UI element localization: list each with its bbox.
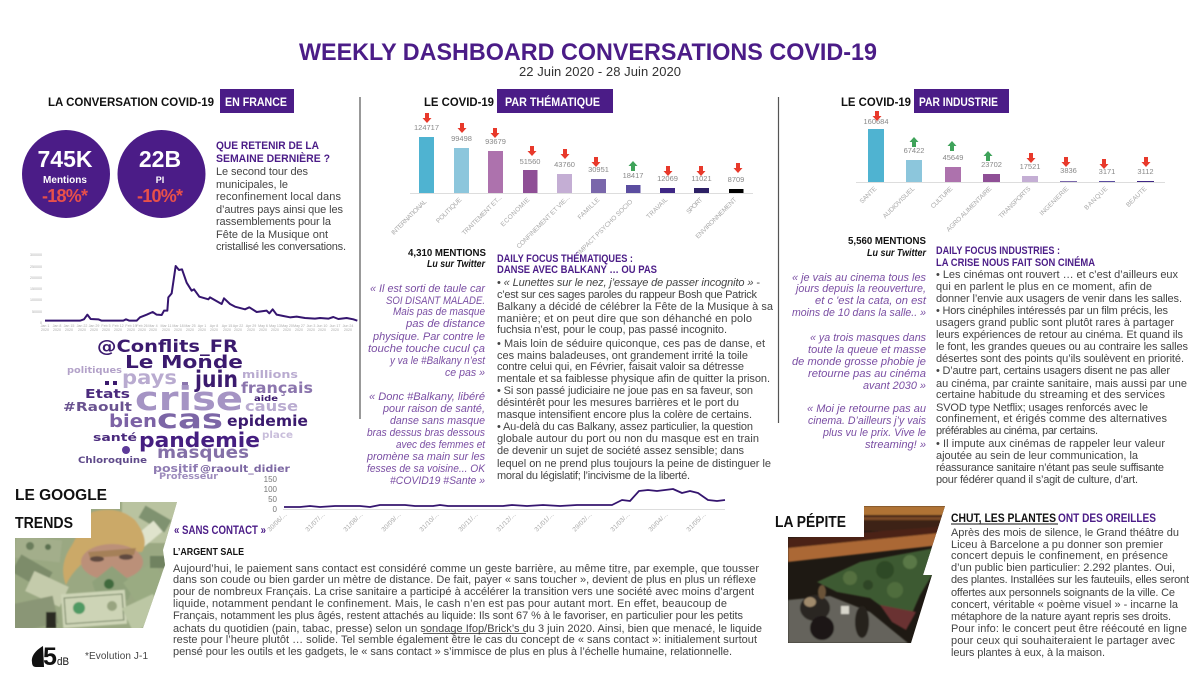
line chart: mentions over time: 2020 [65, 328, 73, 332]
text block: daily focus thématiques: • Mais loin de séduire quiconque, ces pas de danse, et [497, 338, 765, 350]
text block: daily focus industries: certaine habitude du streaming et des services [936, 389, 1166, 401]
line chart: google trends: 0 [273, 505, 278, 514]
line chart: mentions over time: Jun 17 [330, 324, 340, 328]
text block: chut les plantes: Liceu à Barcelone a pu donner son premier [951, 539, 1163, 551]
text block: daily focus thématiques [497, 252, 774, 482]
line chart: mentions over time: 0 [40, 321, 42, 325]
line chart: mentions over time: 2020 [102, 328, 110, 332]
quotes: industries: et c 'est la cata, on est [815, 295, 927, 307]
quotes: thématique: Mais pas de masque [393, 306, 485, 318]
line chart: mentions over time: 2020 [78, 328, 86, 332]
text block: que retenir: rassemblements pour la [216, 216, 332, 228]
line chart: google trends: 29/02/... [571, 511, 594, 533]
text block: daily focus industries: confinement, et érigés comme des alternatives [936, 413, 1168, 425]
quotes: thématique: « Donc #Balkany, libéré [369, 391, 485, 403]
quotes: industries: « je vais au cinema tous les [792, 272, 926, 284]
line chart: mentions over time: Apr 29 [246, 324, 256, 328]
text block: que retenir: d’autres pays ainsi que les [216, 204, 344, 216]
line chart: mentions over time: 150000 [30, 287, 42, 291]
bar chart: thématiques: 18417 [623, 171, 643, 180]
line chart: mentions over time: 2020 [127, 328, 135, 332]
panel: par thématique [366, 89, 774, 487]
word cloud: place [262, 430, 293, 441]
heading: le google trends: TRENDS [15, 515, 73, 532]
stat circle: PI: 22B [139, 146, 181, 172]
line chart: mentions over time: Feb 26 [136, 324, 148, 328]
panel: la conversation en France [22, 89, 357, 482]
text block: daily focus thématiques: contre celui qui, en Février, faisait valoir sa détresse [497, 361, 744, 373]
bar chart: thématiques: 12069 [657, 174, 678, 183]
line chart: google trends: 100 [264, 485, 278, 494]
text block: sans contact article: pensé pour les outils et les gadgets, le « sans contact » s’immisce de plus en plus à l’échelle humaine, relationnelle. [173, 646, 732, 658]
line chart: google trends: 30/09/... [380, 511, 403, 533]
line chart: mentions over time: 2020 [53, 328, 61, 332]
stat circle: mentions [22, 130, 110, 218]
title: WEEKLY DASHBOARD CONVERSATIONS COVID-19 [299, 39, 877, 66]
word cloud: masques [157, 443, 249, 463]
line chart: mentions over time: Mar 18 [172, 324, 184, 328]
text block: chut les plantes: ONT DES OREILLES [1058, 513, 1156, 525]
bar chart: thématiques: 11021 [691, 174, 712, 183]
bar chart: thématiques: POLITIQUE [435, 196, 464, 225]
line chart: google trends [264, 475, 725, 533]
line chart: mentions over time: Jan 29 [89, 324, 99, 328]
line chart: mentions over time: 250000 [30, 265, 42, 269]
line chart: google trends: 30/06/... [266, 511, 289, 533]
quotes: thématique: bras dessus bras dessous [367, 427, 485, 439]
text block: daily focus thématiques: • Au-delà du cas Balkany, assez particulier, la question [497, 421, 753, 433]
heading: par industrie: LE COVID-19 [841, 97, 911, 109]
text block: sans contact article: pour de nombreux Français. La crise sanitaire a participé à accélérer la transition vers une société avec moins d’argent [173, 586, 754, 598]
heading: par thématique: LE COVID-19 [424, 97, 494, 109]
bar chart: industries: 3112 [1137, 167, 1154, 176]
bar chart: thématiques: 124717 [414, 123, 439, 132]
bar chart: thématiques: 30951 [588, 165, 609, 174]
word cloud: positif [153, 462, 198, 475]
heading: la pépite: LA PÉPITE [775, 512, 846, 531]
icon: 5dB logo [32, 643, 69, 671]
line chart: mentions over time: 2020 [271, 328, 279, 332]
text block: daily focus thématiques: • « Lunettes sur le nez, j’essaye de passer incognito » - [497, 277, 760, 289]
text block: chut les plantes: d’un public bien particulier: 2.292 plantes. Oui, [951, 562, 1175, 574]
text block: sans contact article: dans son coude ou bien garder un mètre de distance. De fait, payer « sans toucher », devient de plus en plus un réflexe [173, 574, 756, 586]
text block: daily focus thématiques: DAILY FOCUS THÉMATIQUES : [497, 252, 633, 265]
bar chart: industries: 3171 [1099, 167, 1115, 176]
word cloud: juin [194, 367, 238, 393]
text block: sans contact article: liquide, notamment pendant le confinement. Mais, le cash n’en est pas pour autant mort. En effet, beaucoup de [173, 598, 727, 610]
word cloud: millions [242, 368, 299, 381]
word cloud: Chloroquine [78, 456, 147, 466]
line chart: mentions over time: 2020 [114, 328, 122, 332]
heading: la conversation: LA CONVERSATION COVID-19 [48, 97, 214, 109]
text block: daily focus industries: SVOD type Netflix; usages renforcés avec le [936, 402, 1148, 414]
text block: daily focus thématiques: ces mains baladeuses, ont grandement irrité la toile [497, 350, 748, 362]
quotes: thématique: danse sans masque [390, 415, 485, 427]
line chart: mentions over time: May 27 [293, 324, 305, 328]
word cloud: Le Monde [125, 352, 243, 373]
bar chart: thématiques: SPORT [685, 196, 704, 216]
word cloud: @raoult_didier [200, 464, 290, 475]
word cloud: #Raoult [63, 399, 132, 414]
bar chart: thématiques: ECONOMIE [500, 196, 532, 228]
stat circle: mentions: 745K [38, 146, 93, 172]
bar chart: industries: SANTE [859, 185, 879, 205]
bar chart: thématiques: IMPACT PSYCHO SOCIO [576, 198, 634, 256]
line chart: mentions over time: 2020 [247, 328, 255, 332]
text block: chut les plantes: offertes aux personnels soignants de la ville. Ce [951, 587, 1175, 599]
quotes: thématique: SOI DISANT MALADE. [386, 295, 485, 307]
text block: daily focus industries [936, 245, 1188, 486]
heading: par thématique [424, 89, 613, 113]
quotes: thématique: fesses de sa voisine... OK [367, 463, 486, 475]
heading: la conversation: EN FRANCE [225, 97, 287, 109]
text block: que retenir: Fête de la Musique ont [216, 229, 328, 241]
bar chart: thématiques: CONFINEMENT ET VIE... [516, 194, 572, 250]
text block: daily focus thématiques: fuchsia n’est, pour le coup, pas passé incognito. [497, 324, 727, 336]
quotes: thématique: pas de distance [405, 318, 485, 330]
line chart: mentions over time: 2020 [223, 328, 231, 332]
text block: chut les plantes: concert depuis le confinement, en présence [951, 550, 1168, 562]
bar chart: industries: TRANSPORTS [998, 185, 1033, 220]
line chart: mentions over time: 100000 [30, 298, 42, 302]
line chart: mentions over time: 2020 [198, 328, 206, 332]
text block: daily focus industries: le font, les grandes queues ou au contraire les salles [936, 341, 1188, 353]
text block: daily focus thématiques: c’est sur ces sages paroles du rappeur Bosh que Patrick [497, 289, 758, 301]
quotes: industries [792, 272, 927, 451]
text block: chut les plantes: des plantes. Installées sur les fauteuils, elles seront [951, 574, 1189, 586]
line chart: mentions over time: 2020 [162, 328, 170, 332]
bar chart: industries: INGENIERIE [1039, 185, 1071, 217]
bar chart: industries: BANQUE [1083, 185, 1110, 212]
text block: que retenir: municipales, le [216, 179, 288, 191]
mention count: thématique: 4,310 MENTIONS [408, 247, 486, 259]
bar chart: industries: CULTURE [930, 185, 955, 210]
bar chart: thématiques: FAMILLE [577, 196, 602, 221]
text: l'argent sale heading: L’ARGENT SALE [173, 546, 244, 558]
line chart: mentions over time: Apr 1 [198, 324, 206, 328]
word cloud: pays [122, 367, 177, 389]
text block: daily focus industries: • Les cinémas ont rouvert … et c’est d’ailleurs eux [936, 269, 1178, 281]
panel: la pépite [775, 504, 1189, 659]
heading: par industrie: PAR INDUSTRIE [919, 97, 998, 109]
bar chart: thématiques: TRAVAIL [645, 196, 670, 221]
text block: sans contact article: reste pour l’heure plutôt … solide. Tel semble également être le cas du concept de « sans contact »: initialement surtout [173, 634, 757, 646]
footnote: evolution: *Evolution J-1 [85, 651, 148, 662]
word cloud: epidemie [227, 412, 308, 430]
stat circle: PI: PI [156, 175, 164, 185]
text block: daily focus thématiques: moral du législatif; l’incivisme de la liberté. [497, 470, 690, 482]
text block: chut les plantes: Après des mois de silence, le Grand théâtre du [951, 527, 1179, 539]
word cloud: français [241, 379, 313, 397]
line chart: mentions over time: 2020 [234, 328, 242, 332]
panel: le google trends [10, 475, 762, 658]
bar chart: thématiques: 43760 [554, 160, 575, 169]
quotes: industries: jours depuis la reouverture, [794, 283, 926, 295]
text block: que retenir: QUE RETENIR DE LA [216, 140, 319, 152]
text block: sans contact article: Français, notamment les plus âgés, restent attachés au liquide: Ils sont 67 % à le favoriser, en particulier pour les petits [173, 610, 744, 622]
line chart: google trends: 150 [264, 475, 278, 484]
quotes: thématique [366, 283, 486, 487]
stat circle: mentions: -18%* [42, 186, 88, 206]
text block: que retenir [216, 140, 346, 253]
line chart: mentions over time: 50000 [32, 310, 42, 314]
text: sans contact title: « SANS CONTACT » [174, 525, 266, 537]
quotes: industries: de monde grosse phobie je [792, 356, 926, 368]
bar chart: industries: 17521 [1020, 162, 1040, 171]
panel: par industrie [792, 89, 1188, 486]
text block: daily focus industries: • Il impute aux cinémas de rappeler leur valeur [936, 438, 1165, 450]
line chart: mentions over time: Apr 22 [233, 324, 243, 328]
line chart: mentions over time: Feb 19 [125, 324, 137, 328]
word cloud: bien [109, 411, 157, 432]
line chart: mentions over time: May 6 [258, 324, 268, 328]
line chart: mentions over time: May 13 [269, 324, 281, 328]
text block: daily focus industries: désertes sont des points qu’ils soulèvent en priorité. [936, 353, 1184, 365]
line chart: mentions over time: 2020 [331, 328, 339, 332]
word cloud: @Conflits_FR [97, 337, 238, 357]
word cloud: cause [245, 399, 298, 415]
text block: daily focus industries: ajoutée au sein de leur communication, la [936, 450, 1139, 462]
line chart: google trends: 31/05/... [685, 511, 708, 533]
text block: chut les plantes [951, 513, 1189, 659]
mention count: industries: Lu sur Twitter [867, 247, 927, 259]
text block: que retenir: reconfinement local dans [216, 191, 342, 203]
line chart: mentions over time: Jan 15 [64, 324, 74, 328]
line chart: google trends: 30/04/... [647, 511, 670, 533]
mention count: industries [848, 235, 927, 259]
bar chart: industries: 160684 [863, 117, 889, 126]
quotes: industries: moins de 10 dans la salle.. » [792, 307, 926, 319]
text block: daily focus thématiques: désintérêt pour les mesures barrières et le port du [497, 397, 739, 409]
word cloud: Etats [85, 386, 130, 401]
line chart: mentions over time: Apr 15 [222, 324, 232, 328]
text block: sans contact article: achats du quotidien (pain, tabac, presse) selon un sondage Ifop/Brick’s du 3 juin 2020. Ainsi, bien que menacé, le liquide [173, 623, 762, 635]
text block: daily focus thématiques: globale autour du port ou non du masque est en train [497, 433, 759, 445]
bar chart: thématiques: INTERNATIONAL [390, 198, 429, 237]
text block: sans contact article [173, 563, 762, 658]
line chart: mentions over time: 2020 [307, 328, 315, 332]
text block: daily focus industries: préférables au cinéma, par certains. [936, 425, 1098, 437]
text block: chut les plantes: concert, véritable « poème visuel » - incarne la [951, 599, 1179, 611]
bar chart: thématiques: 51560 [520, 157, 540, 166]
word cloud: pandemie [139, 428, 260, 452]
line chart: mentions over time: Jan 8 [53, 324, 61, 328]
text block: chut les plantes: Pour info: le concert peut être réécouté en ligne [951, 623, 1187, 635]
quotes: industries: cinema. D’ailleurs j’y vais [808, 415, 926, 427]
line chart: mentions over time: 2020 [174, 328, 182, 332]
bar chart: thématiques [390, 113, 753, 256]
quotes: thématique: avec des femmes et [396, 439, 486, 451]
line chart: mentions over time: Jun 24 [343, 324, 353, 328]
quotes: industries: « Moi je retourne pas au [807, 403, 926, 415]
line chart: mentions over time: May 20 [281, 324, 293, 328]
quotes: industries: retourne pas au cinéma [808, 368, 926, 380]
text block: daily focus thématiques: de devenir un sujet de société assez sensible; dans [497, 445, 744, 457]
line chart: mentions over time: Feb 5 [101, 324, 111, 328]
line chart: mentions over time: 200000 [30, 276, 42, 280]
line chart: google trends: 50 [268, 495, 278, 504]
line chart: google trends: 31/10/... [418, 511, 441, 533]
text block: daily focus industries: DAILY FOCUS INDUSTRIES : [936, 245, 1060, 257]
word cloud: cas [157, 404, 223, 435]
line chart: google trends: 31/03/... [609, 511, 632, 533]
bar chart: thématiques: 8709 [728, 175, 744, 184]
line chart: mentions over time [30, 253, 357, 332]
line chart: mentions over time: 2020 [210, 328, 218, 332]
word cloud: crise [135, 379, 243, 418]
text block: que retenir: Le second tour des [216, 166, 308, 178]
text block: daily focus industries: LA CRISE NOUS FAIT SON CINÉMA [936, 256, 1095, 269]
quotes: thématique: physique. Par contre le [372, 331, 485, 343]
text block: chut les plantes: pour ceux qui souhaiteraient le partager avec [951, 635, 1176, 647]
quotes: industries: plus vu le prix. Vive le [822, 427, 926, 439]
word cloud: Professeur [159, 472, 219, 482]
text block: que retenir: cristallisé les conversations. [216, 241, 346, 253]
line chart: google trends: 31/07/... [304, 511, 327, 533]
text block: daily focus thématiques: lequel on ne prend plus toujours la peine de distinguer le [497, 458, 771, 470]
line chart: mentions over time: Mar 11 [161, 324, 171, 328]
heading: le google trends [15, 487, 107, 532]
mention count: thématique: Lu sur Twitter [427, 258, 486, 270]
word cloud [63, 337, 313, 482]
line chart: mentions over time: 2020 [259, 328, 267, 332]
bar chart: industries: AUDIOVISUEL [882, 185, 917, 220]
line chart: mentions over time: 2020 [41, 328, 49, 332]
line chart: mentions over time: Jun 10 [317, 324, 327, 328]
mention count: thématique [408, 247, 486, 270]
heading: le google trends: LE GOOGLE [15, 487, 107, 504]
line chart: mentions over time: Mar 4 [148, 324, 158, 328]
bar chart: industries: BEAUTE [1125, 185, 1149, 209]
image: woman under dollar bills [15, 502, 177, 628]
bar chart: industries: 45649 [943, 153, 963, 162]
line chart: mentions over time: Mar 25 [184, 324, 196, 328]
text block: daily focus industries: • Hors cinéphiles intéressés par un film précis, les [936, 305, 1168, 317]
line chart: mentions over time: 2020 [344, 328, 352, 332]
text block: daily focus industries: donner l’envie aux usagers de venir dans les salles. [936, 293, 1182, 305]
quotes: thématique: #COVID19 #Sante » [390, 475, 485, 487]
line chart: mentions over time: Feb 12 [112, 324, 124, 328]
quotes: thématique: promène sa main sur les [366, 451, 485, 463]
line chart: mentions over time: 2020 [295, 328, 303, 332]
text block: chut les plantes: métaphore de la nature ayant repris ses droits. [951, 611, 1171, 623]
line chart: mentions over time: 2020 [149, 328, 157, 332]
text block: chut les plantes: leurs plantes à eux, à la maison. [951, 647, 1105, 659]
text block: daily focus industries: leurs expériences de retour au cinéma. Et quand ils [936, 329, 1184, 341]
line chart: mentions over time: 2020 [138, 328, 146, 332]
line chart: mentions over time: 2020 [318, 328, 326, 332]
subtitle: dates: 22 Juin 2020 - 28 Juin 2020 [519, 64, 681, 79]
line chart: mentions over time: Jan 1 [41, 324, 49, 328]
text block: daily focus thématiques: Balkany a décidé de célébrer la Fête de la Musique à sa [497, 301, 774, 313]
line chart: google trends: 31/08/... [342, 511, 365, 533]
text block: daily focus thématiques: masque intensifient encore plus la colère de certains. [497, 409, 752, 421]
bar chart: thématiques: ENVIRONNEMENT [695, 196, 738, 240]
text block: daily focus thématiques: mentale et sa faiblesse physique afin de quitter la prison. [497, 373, 770, 385]
text block: daily focus thématiques: • Si son passé judiciaire ne joue pas en sa faveur, son [497, 385, 753, 397]
quotes: thématique: pour raison de santé, [382, 403, 485, 415]
stat circle: PI: -10%* [137, 186, 183, 206]
stat circle: mentions: Mentions [43, 175, 87, 186]
mention count: industries: 5,560 MENTIONS [848, 235, 926, 247]
bar chart: industries: AGRO ALIMENTAIRE [945, 185, 994, 234]
stat circle: PI [118, 130, 206, 218]
quotes: thématique: « Il est sorti de taule car [370, 283, 486, 295]
word cloud: politiques [67, 366, 122, 376]
line chart: mentions over time: 2020 [186, 328, 194, 332]
text block: daily focus thématiques: DANSE AVEC BALKANY … OU PAS [497, 264, 657, 276]
text block: sans contact article: Aujourd’hui, le paiement sans contact est considéré comme un geste barrière, au même titre, par exemple, que tousser [173, 563, 759, 575]
text block: daily focus industries: qui en parlent le plus en ce moment, afin de [936, 281, 1152, 293]
quotes: industries: « ya trois masques dans [810, 332, 926, 344]
line chart: mentions over time: 2020 [90, 328, 98, 332]
bar chart: industries: 3836 [1060, 166, 1077, 175]
icon: 5dB logo: dB [57, 656, 69, 668]
heading: par industrie [841, 89, 1009, 113]
quotes: industries: toute la queue et masse [808, 344, 926, 356]
quotes: thématique: ce pas » [445, 367, 485, 379]
text block: daily focus industries: pour fédérer quand il s’agit de culture, d’art. [936, 474, 1138, 486]
bar chart: thématiques: TRAITEMENT ET... [461, 194, 504, 237]
word cloud: aide [254, 394, 279, 403]
quotes: industries: streaming! » [865, 439, 926, 451]
line chart: mentions over time: Apr 8 [210, 324, 218, 328]
heading: la conversation [48, 89, 294, 113]
text block: daily focus industries: • D’autre part, certains usagers disent ne pas aller [936, 365, 1170, 377]
line chart: google trends: 31/12/... [495, 511, 518, 533]
quotes: thématique: y va le #Balkany n’est [389, 355, 486, 367]
bar chart: industries: 67422 [904, 146, 924, 155]
text block: chut les plantes: CHUT, LES PLANTES [951, 513, 1056, 525]
text block: que retenir: SEMAINE DERNIÈRE ? [216, 152, 330, 165]
text block: daily focus industries: réassurance sanitaire n’étant pas seule suffisante [936, 462, 1164, 474]
bar chart: industries: 23702 [981, 160, 1002, 169]
bar chart: industries [856, 111, 1165, 234]
quotes: industries: avant 2030 » [863, 380, 926, 392]
text block: daily focus thématiques: manière; et on peut dire que son déhanché en polo [497, 313, 752, 325]
line chart: google trends: 30/11/... [457, 511, 480, 533]
bar chart: thématiques: 99498 [451, 134, 472, 143]
image: plants at the opera [785, 504, 950, 646]
icon: 5dB logo: 5 [43, 643, 57, 671]
line chart: mentions over time: Jan 22 [77, 324, 87, 328]
line chart: mentions over time: 300000 [30, 253, 42, 257]
text block: daily focus industries: usagers grand public sont plutôt rares à partager [936, 317, 1174, 329]
word cloud: santé [93, 431, 137, 444]
line chart: mentions over time: 2020 [283, 328, 291, 332]
text block: daily focus industries: au cinéma, par crainte sanitaire, mais aussi par une [936, 378, 1187, 390]
bar chart: thématiques: 93679 [485, 137, 506, 146]
line chart: google trends: 31/01/... [533, 511, 556, 533]
quotes: thématique: touche touche cucul ça [368, 343, 485, 355]
line chart: mentions over time: Jun 3 [307, 324, 315, 328]
heading: par thématique: PAR THÉMATIQUE [505, 96, 600, 109]
